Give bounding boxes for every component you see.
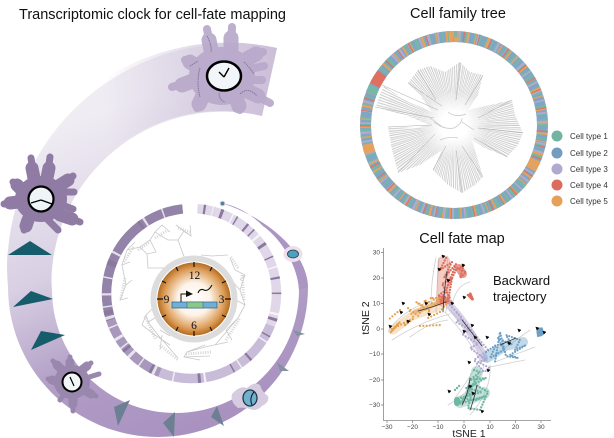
barcode ring — [106, 208, 276, 378]
cluster blobs — [393, 306, 440, 330]
lineage colour ring — [366, 36, 542, 214]
clock face: 3 — [219, 294, 225, 306]
title: transcriptomic clock: Transcriptomic clock for cell-fate mapping — [19, 7, 286, 23]
clock face — [154, 258, 234, 340]
scatter axes: 20 — [512, 424, 519, 431]
green points — [455, 370, 488, 410]
purple points — [450, 305, 490, 372]
scatter axes — [369, 248, 551, 431]
scatter axes: −10 — [369, 351, 380, 358]
lineage tree — [375, 62, 523, 193]
title: cell fate map: Cell fate map — [419, 231, 505, 247]
annotation: backward trajectory — [493, 273, 550, 304]
annotation: backward trajectory: trajectory — [493, 289, 547, 304]
cell: lower right, blue clock — [232, 384, 268, 410]
spiral band — [7, 43, 308, 437]
scatter axes: 30 — [537, 424, 545, 431]
scatter axes: 10 — [373, 300, 380, 308]
scatter axes: 30 — [373, 250, 380, 256]
legend: Cell type 4 — [570, 181, 608, 190]
clock face: 12 — [189, 270, 200, 282]
axis label: tSNE 2: tSNE 2 — [360, 301, 372, 335]
cell: small blue — [284, 246, 302, 262]
red points — [438, 258, 466, 302]
scatter axes: 0 — [462, 424, 466, 431]
scatter axes: 10 — [486, 424, 494, 431]
scatter axes: −30 — [369, 402, 380, 409]
blue points — [486, 332, 526, 362]
cell: left, clock — [4, 157, 80, 230]
scatter axes: −20 — [369, 377, 380, 384]
legend: Cell type 2 — [570, 149, 608, 158]
cell: top, late clock — [172, 27, 270, 110]
orange points — [388, 298, 446, 333]
teal triangles along band — [8, 241, 305, 437]
scatter axes: −10 — [432, 424, 444, 431]
legend — [552, 130, 608, 206]
clock face: 6 — [191, 320, 197, 332]
scatter axes: 0 — [376, 326, 380, 333]
scatter axes: 20 — [373, 275, 380, 282]
scatter axes: −30 — [381, 424, 393, 431]
fate map scatter — [388, 255, 546, 415]
legend: Cell type 3 — [570, 165, 608, 174]
scatter axes: −20 — [407, 424, 418, 431]
legend: Cell type 1 — [570, 132, 608, 141]
cell: tiny blue — [220, 201, 225, 206]
phylogenetic tree around clock — [120, 225, 245, 360]
title: cell family tree: Cell family tree — [410, 6, 506, 22]
annotation: backward trajectory: Backward — [493, 273, 550, 288]
cell: lower left, clock — [48, 357, 99, 411]
legend: Cell type 5 — [570, 197, 608, 206]
clock face: 9 — [164, 294, 170, 306]
